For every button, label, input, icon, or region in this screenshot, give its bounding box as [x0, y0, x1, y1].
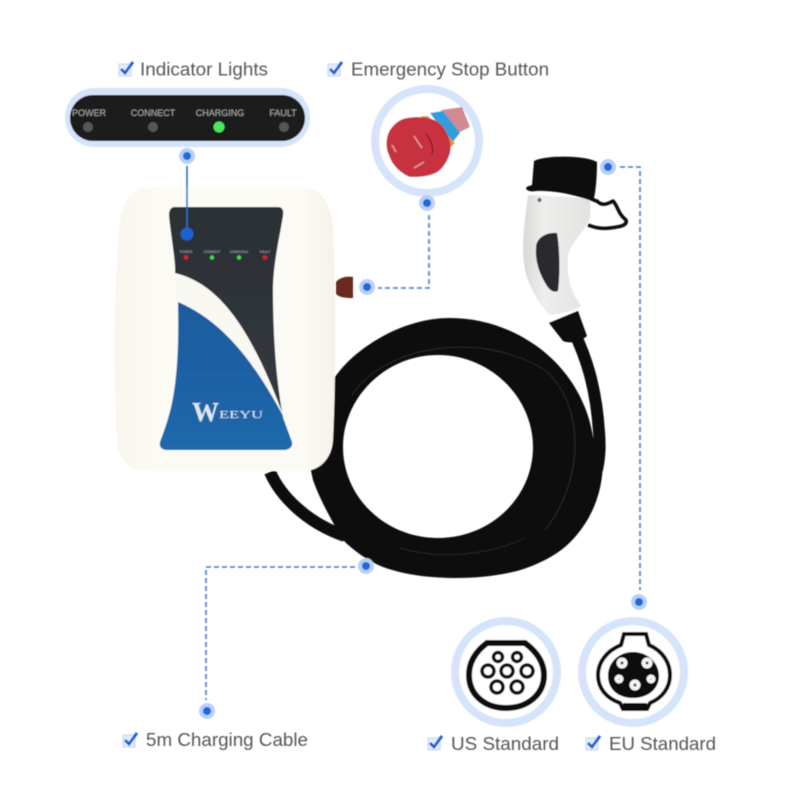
EU label: EU Standard [609, 734, 716, 754]
stop button ring [375, 89, 479, 193]
plug cap [526, 157, 599, 204]
indicator label: Indicator Lights [140, 60, 268, 80]
plug strain relief [549, 311, 587, 342]
brand logo: EEYU [219, 410, 264, 421]
plug grip [536, 233, 559, 292]
callout: indicator lights [65, 60, 310, 240]
EU standard connector [582, 621, 716, 754]
callout: emergency stop button [328, 60, 549, 295]
US connector icon [469, 643, 544, 708]
charger body [115, 187, 335, 471]
dark panel [169, 207, 283, 417]
emergency stop knob on charger [336, 277, 353, 298]
brand logo [192, 397, 264, 427]
cable label: 5m Charging Cable [146, 730, 308, 750]
stop button image [386, 107, 470, 177]
plug latch loop [588, 200, 626, 228]
status LEDs: POWER [180, 250, 193, 254]
white swoosh [175, 273, 284, 417]
emergency label: Emergency Stop Button [351, 60, 549, 80]
status LEDs: FAULT [260, 250, 270, 254]
indicator panel pill [65, 88, 310, 147]
indicator panel pill: CHARGING [196, 108, 244, 118]
indicator panel pill: POWER [72, 108, 106, 118]
charging cable coil [270, 318, 603, 578]
blue panel [160, 302, 292, 450]
plug body [523, 195, 590, 315]
callout: charging cable [123, 558, 374, 750]
status LEDs: CHARGING [230, 250, 248, 254]
charging plug [523, 157, 626, 342]
brand logo: W [192, 397, 219, 427]
status LEDs: CONNECT [204, 250, 220, 254]
indicator panel pill: CONNECT [131, 108, 176, 118]
wall box charger [115, 187, 335, 471]
EU connector icon [598, 634, 670, 711]
US label: US Standard [451, 734, 559, 754]
status LEDs [180, 250, 270, 260]
indicator panel pill: FAULT [269, 108, 297, 118]
callout: plug connector line [600, 159, 647, 610]
US standard connector [428, 621, 559, 754]
